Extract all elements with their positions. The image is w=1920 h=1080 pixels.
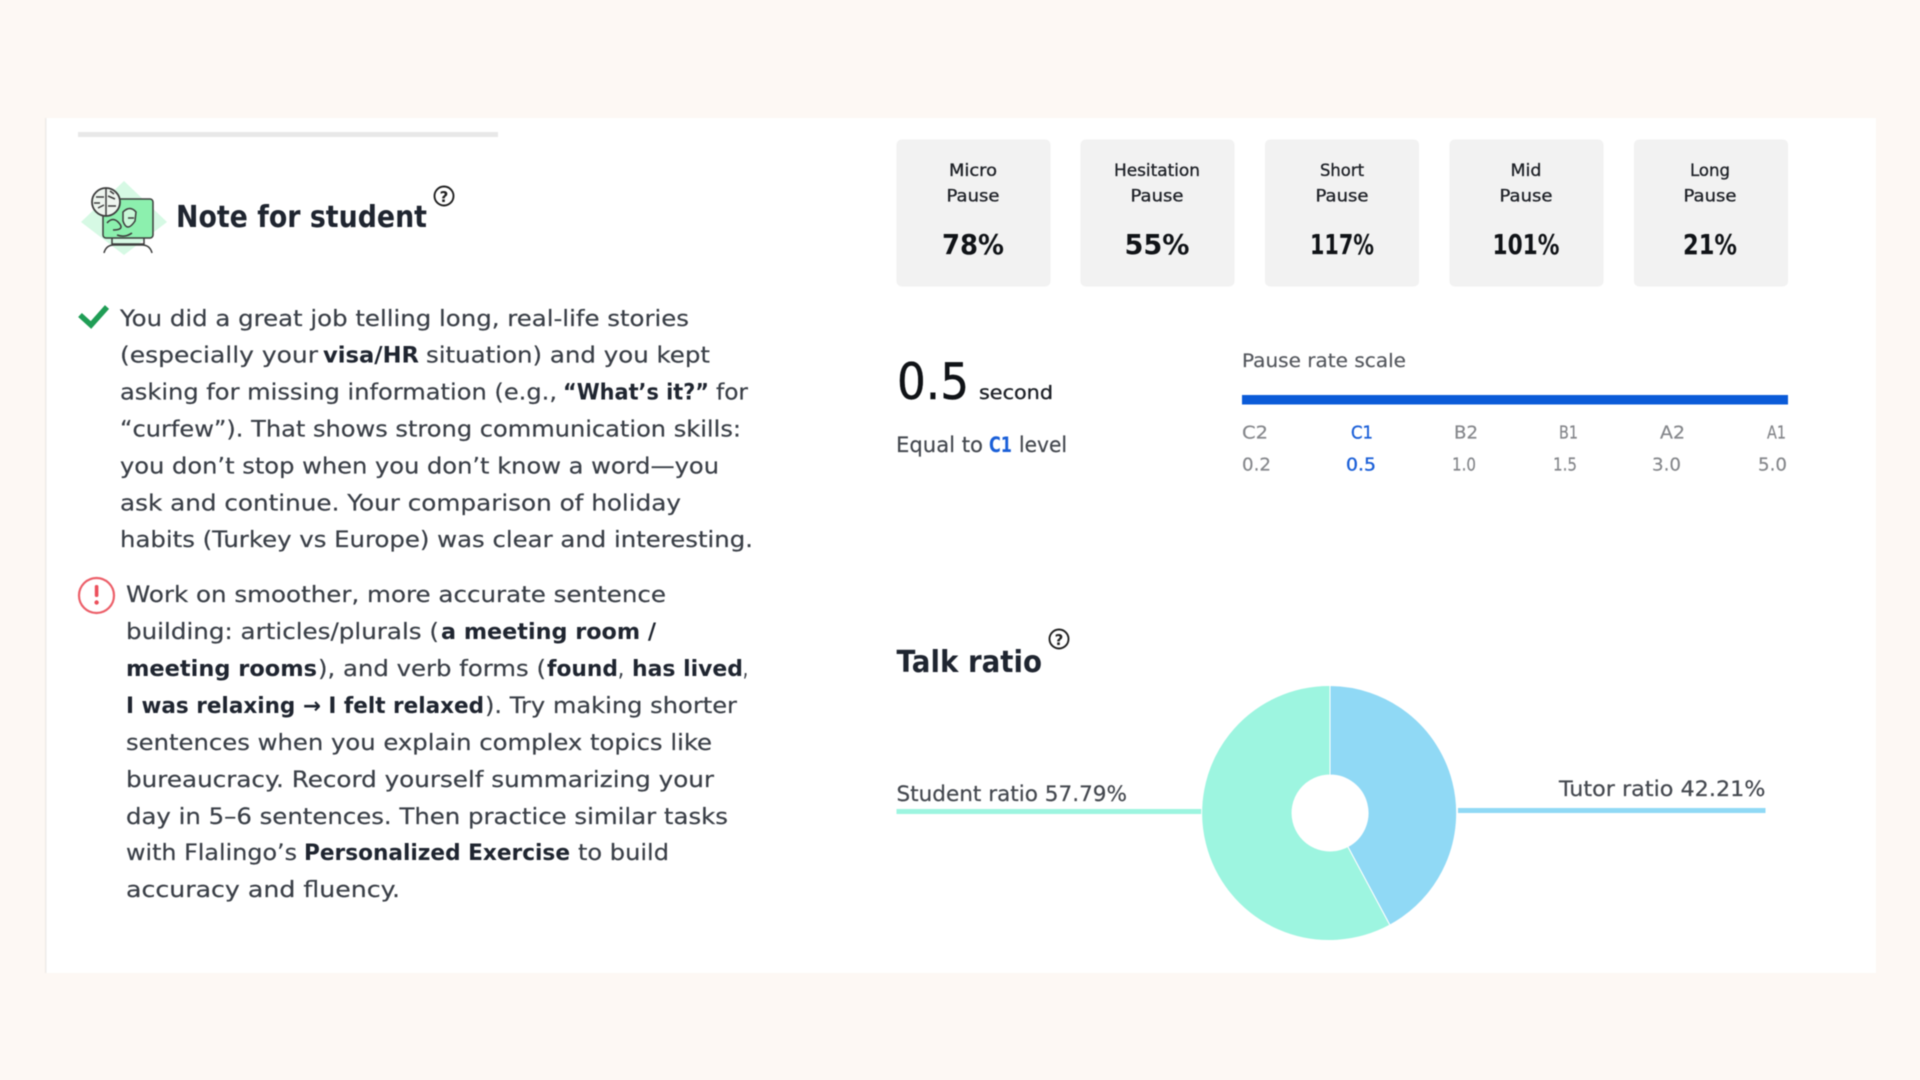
text block: advice: bureaucracy. Record yourself summarizing your xyxy=(126,768,715,793)
heading: note for student: Note for student xyxy=(176,200,427,235)
card: mid pause: 101% xyxy=(1492,228,1560,261)
text block: advice: ). Try making shorter xyxy=(485,694,738,719)
chart: pause rate scale: A2 xyxy=(1660,422,1685,444)
chart: pause rate scale: 0.2 xyxy=(1242,454,1271,476)
text block: praise: visa/HR xyxy=(323,344,419,368)
white report panel xyxy=(45,118,1876,973)
metric: average pause: second xyxy=(979,382,1053,404)
chart: pause rate scale: 1.0 xyxy=(1452,454,1476,476)
card: long pause: Long xyxy=(1690,161,1730,181)
metric: average pause: C1 xyxy=(989,433,1012,457)
panel: pause metric cards xyxy=(896,140,1788,286)
card: micro pause: 78% xyxy=(942,228,1004,261)
card: mid pause: Pause xyxy=(1500,186,1552,206)
card: mid pause: Mid xyxy=(1510,161,1542,181)
text block: praise: (especially your xyxy=(120,344,319,368)
card: hesitation pause: Hesitation xyxy=(1114,161,1200,181)
label: tutor ratio: Tutor ratio 42.21% xyxy=(1558,777,1766,801)
chart: pause rate scale: B2 xyxy=(1454,422,1478,444)
text block: advice: meeting rooms xyxy=(126,657,317,682)
chart: pause rate scale: Pause rate scale xyxy=(1242,350,1406,372)
card: short pause: Short xyxy=(1320,161,1364,181)
card: hesitation pause: Pause xyxy=(1130,186,1184,206)
label: tutor ratio xyxy=(1458,777,1766,813)
text block: advice: with Flalingo’s xyxy=(126,841,297,866)
text block: praise: habits (Turkey vs Europe) was clear and interesting. xyxy=(120,528,753,553)
card: micro pause xyxy=(896,140,1050,286)
text block: praise: You did a great job telling long, real-life stories xyxy=(119,307,689,332)
text block: advice: a meeting room / xyxy=(441,620,657,645)
card: mid pause xyxy=(1450,140,1604,286)
text block: advice: has lived xyxy=(632,657,743,682)
card: long pause: Pause xyxy=(1684,186,1736,206)
chart: pause rate scale xyxy=(1242,350,1788,476)
text block: advice: Work on smoother, more accurate sentence xyxy=(126,583,666,608)
text block: advice: building: articles/plurals ( xyxy=(126,620,439,645)
card: short pause xyxy=(1265,140,1419,286)
text block: advice: I was relaxing → I felt relaxed xyxy=(126,694,484,719)
icon: brain and monitor xyxy=(81,181,167,255)
text block: advice: to build xyxy=(578,841,669,866)
card: short pause: Pause xyxy=(1316,186,1368,206)
text block: praise: “What’s it?” xyxy=(563,380,709,406)
text block: advice xyxy=(126,583,748,903)
text block: praise: asking for missing information (e.g., xyxy=(120,380,557,406)
icon: help xyxy=(434,186,454,206)
card: hesitation pause xyxy=(1080,140,1234,286)
text block: advice: Personalized Exercise xyxy=(304,841,570,866)
card: hesitation pause: 55% xyxy=(1124,228,1190,261)
chart: pause rate scale: A1 xyxy=(1767,422,1786,444)
chart: pause rate scale: 3.0 xyxy=(1652,454,1681,476)
icon: talk ratio help: ? xyxy=(1055,631,1063,649)
icon: green check xyxy=(80,307,107,325)
chart: pause rate scale: C2 xyxy=(1242,422,1268,444)
label: student ratio xyxy=(896,782,1204,814)
chart: pause rate scale: B1 xyxy=(1559,422,1578,444)
icon: talk ratio help xyxy=(1050,630,1068,649)
heading: talk ratio: Talk ratio xyxy=(896,645,1042,680)
text block: advice: found xyxy=(547,657,618,682)
text block: advice: accuracy and fluency. xyxy=(126,878,400,903)
card: micro pause: Micro xyxy=(949,161,997,181)
text block: advice: , xyxy=(618,657,624,682)
panel: talk ratio xyxy=(896,630,1766,940)
card: micro pause: Pause xyxy=(946,186,1000,206)
chart: pause rate scale: 0.5 xyxy=(1346,454,1376,476)
chart: pause rate scale: 5.0 xyxy=(1758,454,1787,476)
text block: praise: “curfew”). That shows strong communication skills: xyxy=(120,418,741,442)
chart: pause rate scale: 1.5 xyxy=(1553,454,1577,476)
text block: praise: you don’t stop when you don’t know a word—you xyxy=(120,454,719,480)
text block: advice: day in 5–6 sentences. Then practice similar tasks xyxy=(126,805,728,830)
card: long pause: 21% xyxy=(1683,228,1737,261)
text block: praise: for xyxy=(716,380,749,406)
card: long pause xyxy=(1634,140,1788,286)
text block: praise: situation) and you kept xyxy=(426,344,710,368)
chart: talk ratio donut xyxy=(1202,685,1457,940)
text block: praise xyxy=(119,307,753,553)
text block: praise: ask and continue. Your comparison of holiday xyxy=(120,492,681,516)
metric: average pause: level xyxy=(1019,433,1067,457)
text block: advice: sentences when you explain complex topics like xyxy=(126,731,712,756)
label: student ratio: Student ratio 57.79% xyxy=(896,782,1127,806)
metric: average pause: Equal to xyxy=(896,433,983,457)
text block: advice: ), and verb forms ( xyxy=(318,657,546,682)
card: short pause: 117% xyxy=(1310,228,1374,261)
metric: average pause: 0.5 xyxy=(897,353,969,411)
chart: pause rate scale: C1 xyxy=(1351,422,1373,444)
icon: red alert xyxy=(79,578,114,613)
text block: advice: , xyxy=(743,657,748,682)
panel: note for student xyxy=(78,132,753,903)
metric: average pause xyxy=(896,353,1067,457)
icon: help: ? xyxy=(440,188,448,206)
